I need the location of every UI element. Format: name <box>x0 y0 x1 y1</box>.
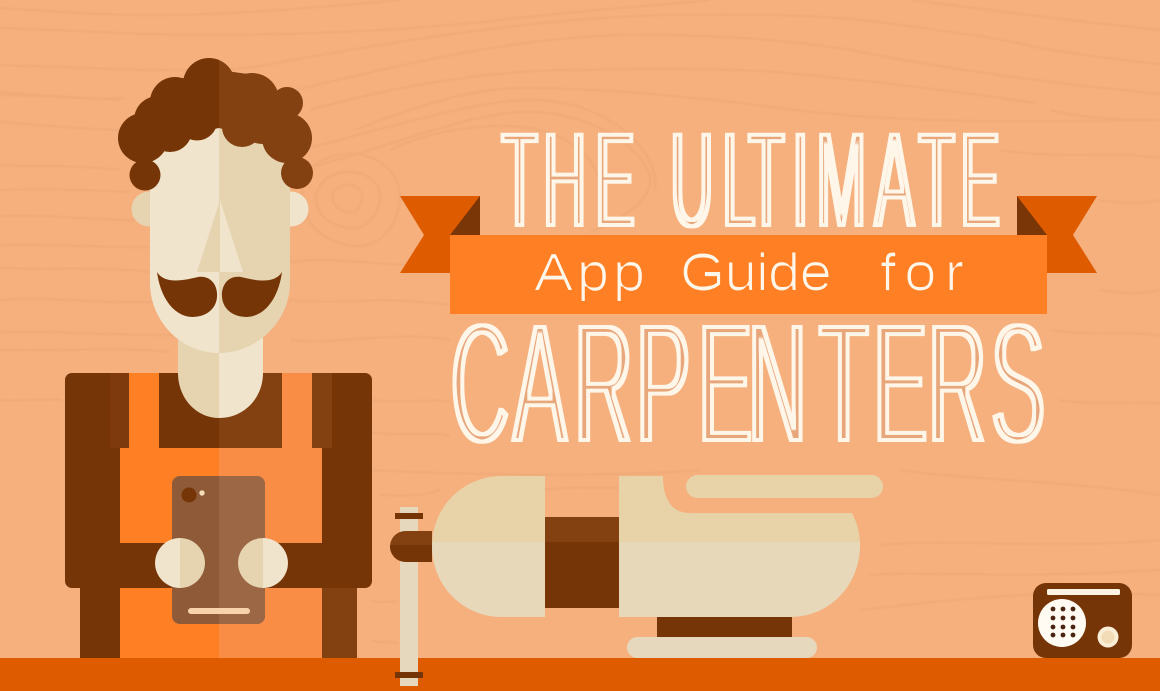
hands <box>155 538 288 588</box>
ribbon banner <box>400 196 1097 314</box>
nose <box>197 200 243 272</box>
vise base <box>627 617 817 658</box>
hair <box>118 58 313 190</box>
moustache <box>157 272 282 317</box>
vise left jaw <box>432 476 545 617</box>
floor strip <box>0 658 1160 691</box>
title line: CARPENTERS: CARPENTERS <box>450 286 1046 480</box>
vise right jaw <box>619 476 860 617</box>
subtitle: App Guide for: Guide <box>680 243 831 301</box>
ribbon band <box>450 235 1047 314</box>
subtitle: App Guide for <box>534 243 972 301</box>
neck <box>178 330 263 418</box>
phone <box>172 476 265 624</box>
vise centre block <box>545 517 619 608</box>
torso and apron <box>65 373 372 658</box>
ribbon right fold <box>1017 196 1047 235</box>
subtitle: App Guide for: for <box>880 243 972 301</box>
icon: radio <box>1033 583 1132 658</box>
vise handle <box>390 531 432 562</box>
ears <box>132 192 308 226</box>
ribbon left tail <box>400 196 480 273</box>
illustration: carpenter <box>65 58 372 658</box>
ribbon left fold <box>450 196 480 235</box>
face <box>150 120 290 353</box>
title line: THE ULTIMATE: THE ULTIMATE <box>501 104 1000 257</box>
vise top bar <box>686 475 883 498</box>
subtitle: App Guide for: App <box>534 243 649 301</box>
vise screw rod <box>395 507 423 686</box>
illustration: bench vise <box>390 475 883 686</box>
ribbon right tail <box>1017 196 1097 273</box>
neck front <box>178 373 263 418</box>
